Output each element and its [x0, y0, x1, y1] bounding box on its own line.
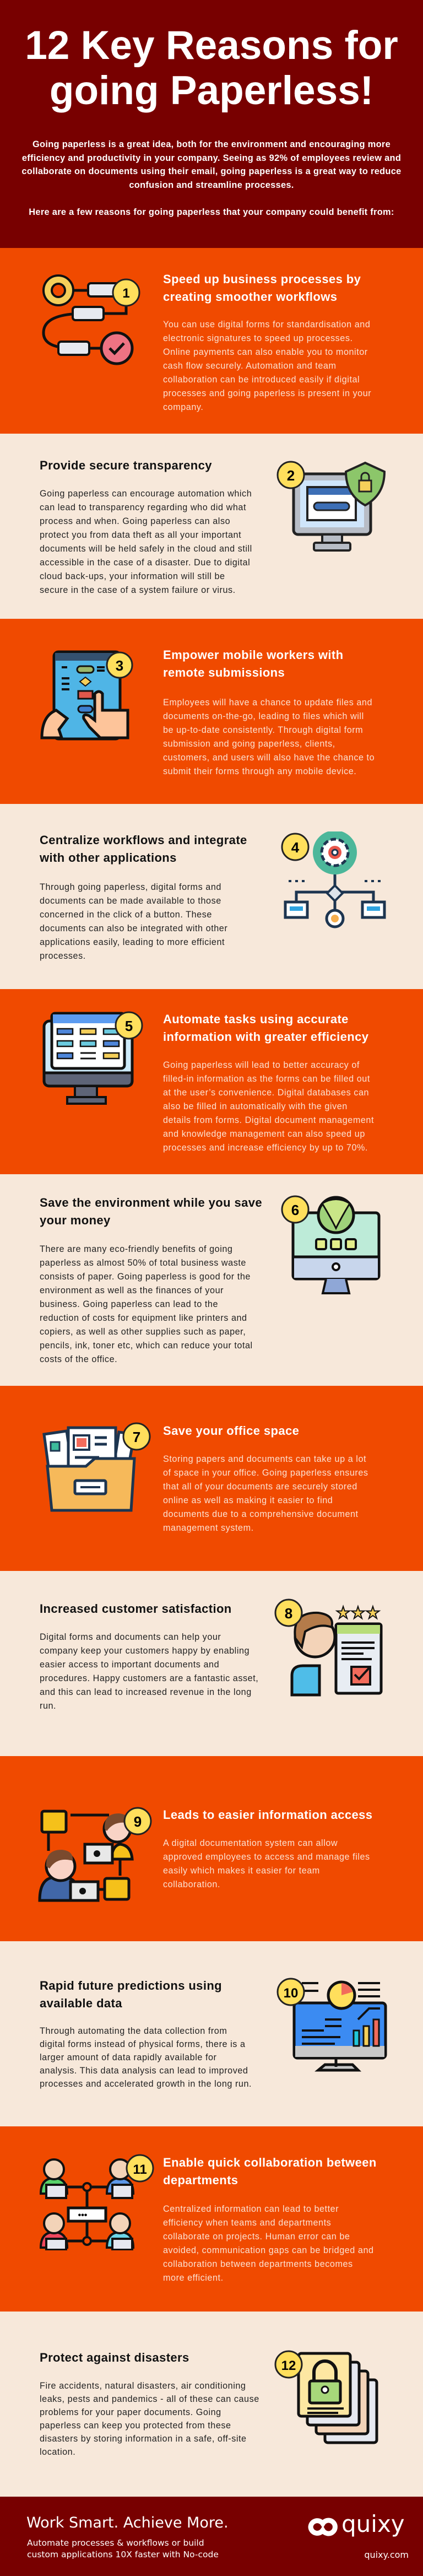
icon: information access — [39, 1807, 152, 1902]
body text: paperless as almost 50% of total business waste — [40, 1258, 246, 1268]
panel: reason 11 — [0, 2126, 423, 2312]
heading — [163, 648, 343, 679]
logo: quixy: quixy — [341, 2510, 405, 2537]
body text — [163, 320, 371, 412]
panel: reason 12 — [0, 2312, 423, 2497]
panel: reason 2 — [0, 434, 423, 619]
heading: Speed up business processes by — [163, 272, 361, 286]
body text: Going paperless can encourage automation which — [40, 489, 252, 499]
heading: Automate tasks using accurate — [163, 1012, 349, 1026]
tagline: Work Smart. Achieve More. — [26, 2514, 229, 2531]
body text: and knowledge management can also speed up — [163, 1129, 365, 1139]
title: 12 Key Reasons for — [25, 23, 398, 68]
body text: details from forms. Digital document management — [163, 1115, 374, 1125]
heading — [40, 833, 247, 865]
subtext — [27, 2538, 219, 2559]
body text: leaks, pests and pandemics - all of these can cause — [40, 2394, 259, 2404]
icon: secure monitor: 2 — [287, 467, 295, 484]
heading: your money — [40, 1213, 111, 1227]
body text — [40, 2381, 259, 2457]
body text: Centralized information can lead to better — [163, 2204, 339, 2214]
body text: submission and going paperless, clients, — [163, 739, 335, 749]
logo: quixy — [308, 2510, 405, 2537]
icon: workflow — [42, 274, 140, 365]
heading: Increased customer satisfaction — [40, 1602, 232, 1616]
heading — [163, 2156, 377, 2187]
body text: disasters by storing information in a safe, off-site — [40, 2434, 247, 2444]
body text — [40, 1632, 258, 1711]
body text: approved employees to access and manage files — [163, 1852, 370, 1862]
icon: eco monitor: 6 — [291, 1202, 299, 1218]
body text: be up-to-date consistently. Through digital form — [163, 725, 363, 735]
body text: processes. — [40, 951, 86, 961]
heading: creating smoother workflows — [163, 290, 337, 304]
icon: locked documents: 12 — [281, 2358, 296, 2373]
body text: of space in your office. Going paperless ensures — [163, 1468, 368, 1478]
intro text: Going paperless is a great idea, both for the environment and encouraging more — [32, 139, 391, 149]
body text: location. — [40, 2447, 75, 2457]
body text: Digital forms and documents can help your — [40, 1632, 221, 1642]
body text: easily which makes it easier for team — [163, 1866, 320, 1876]
heading: Enable quick collaboration between — [163, 2156, 377, 2169]
header — [0, 0, 423, 248]
body text: and this can lead to increased revenue in the long — [40, 1687, 252, 1697]
body text: efficiency when teams and departments — [163, 2218, 331, 2228]
icon: integration — [281, 831, 386, 928]
body text: cash flow securely. Automation and team — [163, 361, 336, 371]
icon: collaboration: 11 — [133, 2162, 147, 2177]
heading — [163, 272, 361, 304]
body text: Through automating the data collection from — [40, 2026, 227, 2036]
body text: pencils, ink, toner etc, which can reduce your total — [40, 1341, 253, 1351]
footer — [0, 2497, 423, 2576]
heading: departments — [163, 2173, 238, 2187]
body text: at the user’s convenience. Digital databases can — [163, 1088, 369, 1098]
icon: tablet: 3 — [116, 657, 123, 674]
body text: documents will be held safely in the cloud and still — [40, 544, 252, 554]
panel: reason 5 — [0, 989, 423, 1174]
icon: document folder: 7 — [133, 1429, 140, 1445]
body text: documents due to a comprehensive document — [163, 1509, 359, 1519]
body text: submit their forms through any mobile device. — [163, 766, 356, 776]
body text: collaboration can be introduced easily if digital — [163, 375, 360, 385]
panel: reason 4 — [0, 804, 423, 989]
body text: secure in the case of a system failure or virus. — [40, 585, 236, 595]
body text: copiers, as well as other supplies such as paper, — [40, 1327, 246, 1337]
subtext: Automate processes & workflows or build — [27, 2538, 204, 2548]
heading: Empower mobile workers with — [163, 648, 343, 662]
url: quixy.com — [364, 2550, 409, 2560]
icon: collaboration — [40, 2154, 154, 2250]
body text: accessible in the case of a disaster. Due to digital — [40, 558, 250, 568]
body text: customers, and users will also have the chance to — [163, 753, 375, 763]
panel: reason 10 — [0, 1941, 423, 2126]
body text: Fire accidents, natural disasters, air conditioning — [40, 2381, 246, 2391]
body text — [40, 882, 227, 961]
title — [25, 23, 398, 113]
body text: Employees will have a chance to update files and — [163, 698, 372, 708]
icon: data monitor: 10 — [284, 1986, 298, 2001]
intro text: efficiency and productivity in your company. Seeing as 92% of employees review and — [22, 153, 401, 163]
heading: Leads to easier information access — [163, 1808, 372, 1822]
body text — [163, 1060, 374, 1153]
body text: consists of paper. Going paperless is good for the — [40, 1272, 251, 1282]
body text: You can use digital forms for standardisation and — [163, 320, 370, 330]
body text — [40, 2026, 252, 2089]
panel: reason 7 — [0, 1386, 423, 1571]
heading — [40, 1979, 222, 2010]
body text: collaboration. — [163, 1880, 220, 1889]
body text: also be filled in automatically with the given — [163, 1101, 348, 1111]
body text: documents can be made available to those — [40, 896, 221, 906]
panel: reason 1 — [0, 248, 423, 434]
subtext: custom applications 10X faster with No-code — [27, 2550, 219, 2559]
body text: more efficient. — [163, 2273, 224, 2283]
body text: business. Going paperless can lead to the — [40, 1299, 218, 1309]
heading: available data — [40, 1996, 122, 2010]
body text — [163, 2204, 374, 2283]
heading: remote submissions — [163, 666, 285, 679]
icon: workflow: 1 — [122, 286, 130, 301]
heading: Centralize workflows and integrate — [40, 833, 247, 847]
icon: integration: 4 — [291, 839, 300, 856]
body text: protect you from data theft as all your important — [40, 530, 241, 540]
body text — [40, 1244, 253, 1364]
body text: Online payments can also enable you to monitor — [163, 347, 368, 357]
heading: with other applications — [40, 851, 177, 865]
body text: process and when. Going paperless can also — [40, 516, 230, 526]
body text: company keep your customers happy by enabling — [40, 1646, 250, 1656]
body text: processes and going paperless is present in your — [163, 388, 371, 398]
icon: automation monitor: 5 — [125, 1018, 133, 1034]
body text — [40, 489, 252, 595]
body text: that all of your documents are securely stored — [163, 1482, 357, 1492]
body text: problems for your paper documents. Going — [40, 2407, 221, 2417]
heading: Save the environment while you save — [40, 1196, 262, 1209]
heading: Save your office space — [163, 1424, 299, 1438]
heading — [40, 1196, 262, 1227]
panel: reason 8 — [0, 1571, 423, 1756]
body text: costs of the office. — [40, 1354, 117, 1364]
body text: processes and accelerated growth in the long run. — [40, 2079, 252, 2089]
body text: online as well as making it easier to find — [163, 1495, 333, 1505]
heading: Provide secure transparency — [40, 458, 212, 472]
panel: reason 9 — [0, 1756, 423, 1941]
panel: reason 3 — [0, 619, 423, 804]
body text: procedures. Happy customers are a fantastic asset, — [40, 1673, 258, 1683]
icon: satisfied customer: 8 — [285, 1605, 292, 1622]
body text: concerned in the click of a button. These — [40, 910, 212, 920]
body text: filled-in information as the forms can be filled out — [163, 1074, 370, 1084]
body text: Through going paperless, digital forms and — [40, 882, 221, 892]
body text — [163, 698, 375, 776]
body text: reduction of costs for equipment like printers and — [40, 1313, 247, 1323]
body text: electronic signatures to speed up processes. — [163, 333, 353, 343]
icon: locked documents — [274, 2351, 378, 2444]
body text: collaboration between departments becomes — [163, 2259, 353, 2269]
intro text — [21, 139, 402, 217]
body text: A digital documentation system can allow — [163, 1838, 338, 1848]
body text: There are many eco-friendly benefits of going — [40, 1244, 232, 1254]
icon: tablet — [41, 650, 133, 741]
title: going Paperless! — [50, 68, 373, 113]
intro text: Here are a few reasons for going paperless that your company could benefit from: — [29, 207, 394, 217]
body text: larger amount of data rapidly available for — [40, 2053, 217, 2062]
icon: data monitor — [276, 1978, 387, 2072]
body text: paperless can keep you protected from these — [40, 2421, 231, 2431]
intro text: confusion and streamline processes. — [129, 180, 294, 190]
icon: document folder — [42, 1423, 151, 1512]
icon: satisfied customer — [274, 1599, 382, 1696]
heading: Rapid future predictions using — [40, 1979, 222, 1992]
body text: Storing papers and documents can take up a lot — [163, 1454, 366, 1464]
panel: reason 6 — [0, 1174, 423, 1386]
body text: cloud back-ups, your information will still be — [40, 571, 225, 581]
icon: information access: 9 — [134, 1813, 142, 1830]
icon: collaboration: ••• — [78, 2211, 88, 2220]
heading: information with greater efficiency — [163, 1030, 368, 1044]
icon: secure monitor — [276, 461, 386, 552]
heading — [163, 1012, 368, 1044]
body text: applications easily, leading to more efficient — [40, 937, 225, 947]
icon: satisfied customer: ★★★ — [336, 1604, 380, 1622]
body text: can lead to transparency regarding who did what — [40, 503, 246, 512]
body text: documents can also be integrated with other — [40, 924, 227, 933]
body text: company. — [163, 402, 203, 412]
body text: environment as well as the finances of your — [40, 1286, 224, 1295]
body text: Going paperless will lead to better accuracy of — [163, 1060, 360, 1070]
body text: analysis. This data analysis can lead to improved — [40, 2066, 248, 2076]
heading: Protect against disasters — [40, 2351, 189, 2364]
icon: eco monitor — [281, 1196, 380, 1294]
body text: easier access to important documents and — [40, 1660, 219, 1670]
body text: processes and increase efficiency by up to 70%. — [163, 1143, 368, 1153]
body text: digital forms instead of physical forms, there is a — [40, 2039, 246, 2049]
body text: documents on-the-go, leading to files which will — [163, 711, 364, 721]
body text: collaborate on projects. Human error can be — [163, 2232, 350, 2242]
body text — [163, 1838, 370, 1889]
intro text: collaborate on documents using their email, going paperless is a great way to reduce — [21, 166, 402, 176]
body text: management system. — [163, 1523, 254, 1533]
body text: avoided, communication gaps can be bridged and — [163, 2245, 374, 2255]
icon: automation monitor — [43, 1012, 143, 1105]
body text — [163, 1454, 368, 1533]
body text: run. — [40, 1701, 56, 1711]
